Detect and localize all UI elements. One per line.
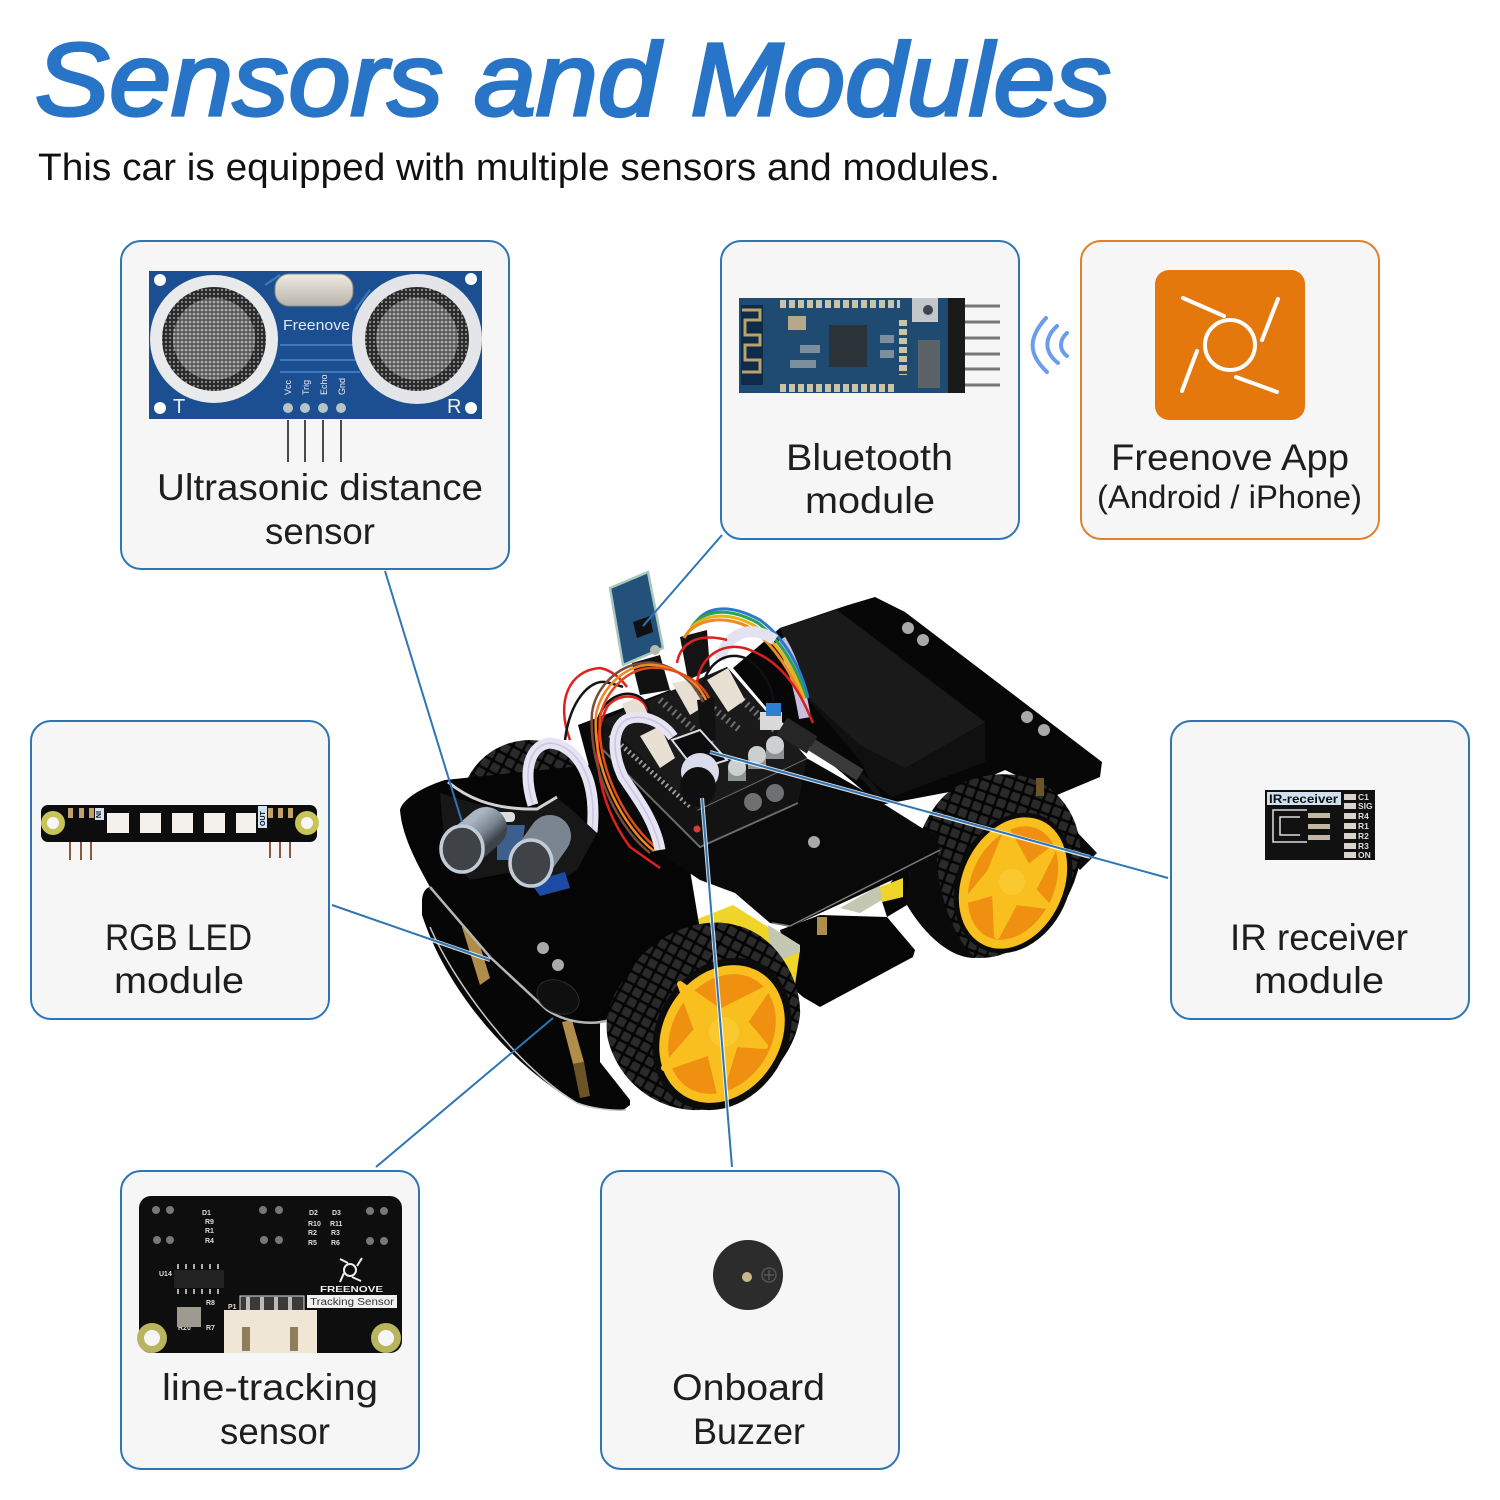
DC power cable: [782, 726, 880, 798]
bottom front plate: [422, 886, 630, 1111]
icon: IR board: R3: [1358, 841, 1369, 851]
icon: tracking board: R4: [205, 1238, 214, 1245]
label: app: (Android / iPhone): [1097, 479, 1362, 515]
red and black wires: [564, 638, 813, 868]
rainbow cable: [684, 609, 808, 698]
ultrasonic sensor on car: [440, 782, 597, 896]
label: ultrasonic: Ultrasonic distance: [157, 467, 483, 508]
label: buzzer: Onboard: [672, 1367, 825, 1408]
black jumper: [697, 698, 716, 742]
panel: IR receiver module: [1171, 721, 1469, 1019]
leader: buzzer: [702, 798, 732, 1167]
icon: ultrasonic module: [149, 271, 482, 462]
label: bluetooth: Bluetooth: [786, 437, 953, 478]
icon: ultrasonic module: Gnd: [337, 378, 347, 395]
rear wheel: [907, 774, 1095, 973]
rear top plate: [733, 597, 1102, 805]
icon: tracking board: Tracking Sensor: [310, 1297, 395, 1308]
control board: [603, 667, 807, 847]
leader: ultrasonic: [385, 571, 462, 822]
icon: ultrasonic module: Vcc: [283, 379, 293, 395]
icon: app logo: [1155, 270, 1305, 420]
icon: tracking board: R5: [308, 1240, 317, 1247]
bluetooth on car: [610, 572, 670, 695]
label: RGB LED: RGB LED: [105, 917, 252, 958]
leader: RGB LED: [332, 905, 490, 960]
middle plate edge highlight: [772, 850, 940, 926]
icon: IR board: ON: [1358, 850, 1371, 860]
icon: IR board: R4: [1358, 811, 1369, 821]
icon: tracking board: R10: [308, 1221, 321, 1228]
front wheel: [607, 922, 820, 1136]
panel: Freenove App: [1081, 241, 1379, 539]
icon: tracking board: D3: [332, 1210, 341, 1217]
icon: tracking board: [137, 1196, 402, 1353]
icon: ultrasonic module: Freenove: [283, 317, 350, 334]
subtitle: This car is equipped with multiple sensors and modules.: [38, 147, 1000, 189]
icon: bluetooth board: [739, 298, 1000, 393]
icon: tracking board: R1: [205, 1228, 214, 1235]
icon: tracking board: R3: [331, 1230, 340, 1237]
label: ultrasonic: sensor: [265, 511, 375, 552]
white connectors: [672, 680, 705, 715]
icon: tracking board: R8: [206, 1300, 215, 1307]
label: buzzer: [672, 1367, 825, 1452]
icon: tracking board: R6: [331, 1240, 340, 1247]
blue button: [760, 712, 782, 730]
icon: IR board: R1: [1358, 821, 1369, 831]
icon: LED strip: IN: [94, 811, 101, 818]
panel: bluetooth module: [721, 241, 1019, 539]
icon: tracking board: R7: [206, 1325, 215, 1332]
panel: RGB LED module: [31, 721, 329, 1019]
rear header block: [680, 630, 710, 680]
leader: IR receiver: [710, 752, 1168, 878]
white ribbon cable on board: [615, 717, 673, 850]
brass standoffs: [462, 778, 1044, 1098]
label: RGB LED: [105, 917, 252, 1001]
plate screws: [537, 622, 1050, 971]
icon: LED strip: [41, 805, 319, 860]
buzzer on board: [681, 753, 719, 791]
panel: onboard buzzer: [601, 1171, 899, 1469]
label: bluetooth: [786, 437, 953, 521]
chassis rear sensor bump: [531, 973, 585, 1021]
icon: tracking board: D2: [309, 1210, 318, 1217]
icon: wireless waves: [1033, 318, 1067, 372]
label: line-tracking: sensor: [220, 1411, 330, 1452]
label: ultrasonic: [157, 467, 483, 552]
battery box: [780, 610, 985, 797]
icon: IR board: C1: [1358, 792, 1369, 802]
label: app: Freenove App: [1111, 437, 1349, 478]
icon: IR board: [1265, 790, 1375, 860]
capacitors: [728, 745, 784, 781]
icon: tracking board: FREENOVE: [320, 1284, 383, 1294]
icon: tracking board: R9: [205, 1219, 214, 1226]
label: line-tracking: line-tracking: [162, 1367, 378, 1408]
rear small axle piece: [1070, 830, 1097, 870]
middle plate: [578, 690, 940, 927]
white ribbon cable on left wheel: [528, 743, 593, 832]
motor shadow block: [880, 860, 930, 917]
IR module on board: [672, 730, 727, 770]
leader: line tracking: [376, 1018, 553, 1167]
leader: bluetooth: [643, 535, 722, 626]
label: app: [1097, 437, 1362, 515]
label: line-tracking: [162, 1367, 378, 1452]
yellow motors: [626, 878, 903, 985]
icon: tracking board: R2: [308, 1230, 317, 1237]
left transducer body: [464, 828, 486, 847]
panel: line-tracking sensor: [121, 1171, 419, 1469]
top front plate: [400, 765, 700, 1023]
robot car photo illustration: [400, 572, 1102, 1136]
top white ribbon: [720, 632, 775, 660]
plate edge highlight: [430, 887, 643, 1023]
label: bluetooth: module: [805, 480, 935, 521]
right transducer body: [531, 836, 550, 863]
label: IR receiver: [1230, 917, 1408, 1001]
icon: tracking board: P1: [228, 1304, 237, 1311]
icon: IR board: IR-receiver: [1269, 792, 1338, 806]
icon: tracking board: D1: [202, 1210, 211, 1217]
icon: ultrasonic module: R: [447, 396, 461, 418]
icon: ultrasonic module: Trig: [301, 380, 311, 395]
label: IR receiver: module: [1254, 960, 1384, 1001]
bottom centre plate: [780, 915, 915, 1007]
panel: ultrasonic distance sensor: [121, 241, 509, 569]
purple flat ribbon: [780, 640, 805, 718]
label: IR receiver: IR receiver: [1230, 917, 1408, 958]
icon: IR board: SIG: [1358, 801, 1373, 811]
plate bottom edge highlight: [430, 927, 626, 1110]
icon: buzzer: [713, 1240, 783, 1310]
label: RGB LED: module: [114, 960, 244, 1001]
label: buzzer: Buzzer: [693, 1411, 805, 1452]
icon: ultrasonic module: T: [173, 396, 185, 418]
back-left wheel: [460, 740, 600, 880]
icon: ultrasonic module: Echo: [319, 374, 329, 395]
icon: tracking board: U14: [159, 1271, 172, 1278]
title: Sensors and Modules: [35, 23, 1111, 138]
icon: tracking board: R20: [178, 1325, 191, 1332]
icon: LED strip: OUT: [260, 810, 267, 826]
icon: IR board: R2: [1358, 831, 1369, 841]
icon: tracking board: R11: [330, 1221, 343, 1228]
